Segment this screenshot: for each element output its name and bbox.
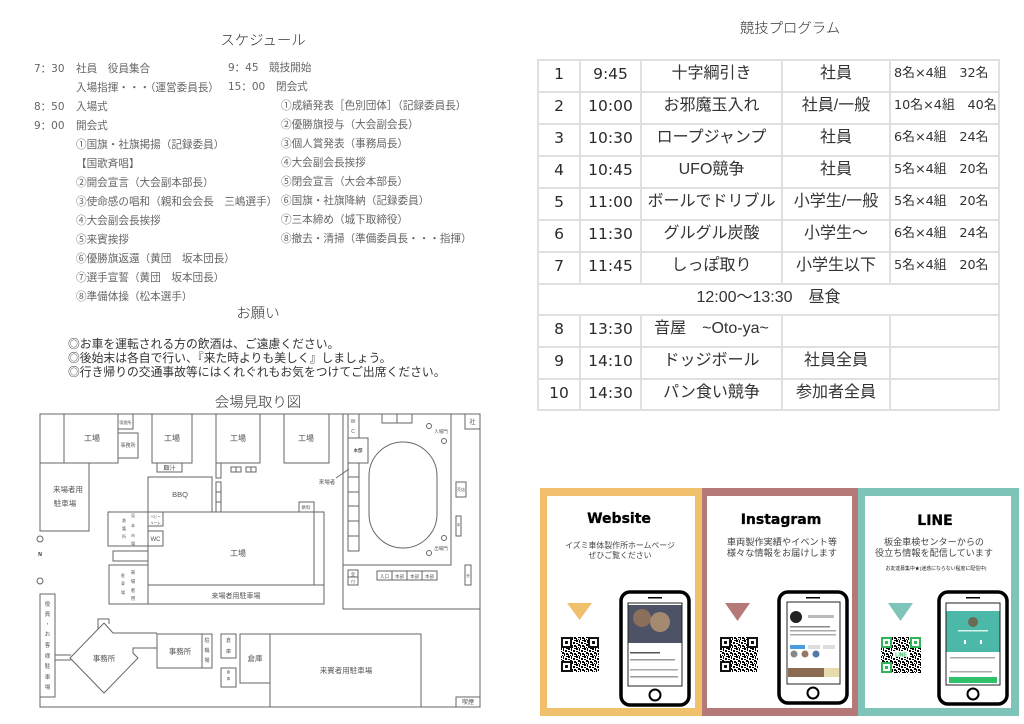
chart: venue floor plan: 見	[131, 512, 135, 518]
table: competition program: 小学生～	[804, 225, 868, 242]
qr code: line: LINE	[895, 652, 907, 658]
chart: venue floor plan: 輪	[204, 647, 210, 654]
chart: venue floor plan: 役	[45, 600, 51, 608]
panel: schedule right column: 9：45	[228, 62, 259, 74]
heading: venue map: 会場見取り図	[215, 395, 301, 411]
panel: schedule left column: 開会式	[76, 120, 108, 132]
table: competition program: 14:30	[588, 384, 633, 402]
panel: schedule left column: ⑤来賓挨拶	[76, 234, 129, 246]
chart: venue floor plan: 社	[469, 418, 476, 426]
table: competition program: パン食い競争	[663, 384, 760, 400]
chart: venue floor plan: W	[351, 419, 356, 425]
chart: venue floor plan: 救	[122, 517, 126, 523]
chart: venue floor plan: 売	[466, 573, 470, 578]
table: competition program: 5名×4組 20名	[894, 194, 988, 209]
table: competition program: 参加者全員	[796, 384, 876, 400]
card: website	[540, 488, 702, 716]
chart: venue floor plan: 本部	[410, 573, 419, 580]
title: competition program: 競技プログラム	[740, 21, 840, 37]
table: competition program: 社員/一般	[802, 97, 870, 114]
chart: venue floor plan: 駐	[204, 637, 210, 644]
chart: venue floor plan: N	[38, 552, 42, 558]
text block: requests: ◎後始末は各自で行い、『来た時よりも美しく』しましょう。	[68, 351, 391, 365]
table: competition program: 10名×4組 40名	[894, 98, 997, 113]
chart: venue floor plan: 来場者用駐車場	[212, 591, 260, 600]
card: line: LINE	[917, 513, 953, 529]
chart: venue floor plan: 場	[131, 540, 135, 546]
icon: phone website	[621, 592, 689, 705]
table: competition program: 9:45	[593, 65, 628, 83]
table: competition program: ドッジボール	[663, 352, 760, 369]
chart: venue floor plan: 者	[131, 588, 136, 594]
table: competition program: 14:10	[588, 352, 633, 370]
chart: venue floor plan: 駐車場	[54, 498, 77, 508]
table: competition program: しっぽ取り	[671, 257, 752, 274]
table: competition program: 5	[554, 193, 564, 211]
chart: venue floor plan: 客	[45, 641, 51, 649]
panel: schedule left column	[34, 62, 277, 303]
chart: venue floor plan: 工場	[164, 433, 180, 443]
chart: venue floor plan: 出場門	[434, 545, 448, 552]
text block: requests	[68, 337, 446, 379]
table: competition program: 十字綱引き	[671, 65, 752, 82]
table: competition program: 8名×4組 32名	[894, 66, 988, 81]
table: competition program: 11:30	[588, 225, 633, 243]
heading: requests: お願い	[236, 306, 280, 322]
table: competition program: 6名×4組 24名	[894, 130, 988, 145]
chart: venue floor plan: 場	[45, 683, 51, 691]
panel: schedule left column: 入場指揮・・・（運営委員長）	[76, 82, 219, 94]
chart: venue floor plan: 駐	[121, 572, 125, 578]
chart: venue floor plan	[36, 414, 480, 708]
chart: venue floor plan: 工場	[230, 433, 246, 443]
panel: schedule right column: ⑥国旗・社旗降納（記録委員）	[281, 195, 429, 207]
table: competition program: 3	[554, 129, 564, 147]
card: website: ぜひご覧ください	[588, 550, 652, 560]
table: competition program: 小学生以下	[796, 257, 876, 274]
table: competition program: 4	[554, 161, 564, 179]
table: competition program: 社員	[820, 65, 852, 82]
table: competition program: UFO競争	[679, 161, 744, 178]
chart: venue floor plan: 様	[45, 652, 51, 660]
qr code: line	[881, 637, 921, 673]
table: competition program	[537, 59, 1000, 411]
panel: schedule left column: 入場式	[76, 101, 108, 113]
chart: venue floor plan: ベビー	[150, 514, 161, 519]
panel: schedule left column: 8：50	[34, 101, 65, 113]
chart: venue floor plan: 倉庫	[248, 653, 263, 663]
chart: venue floor plan: 来場者	[319, 478, 336, 486]
chart: venue floor plan: 本部	[354, 447, 363, 454]
chart: venue floor plan: 事務所	[93, 653, 116, 663]
chart: venue floor plan: 本部	[425, 573, 434, 580]
chart: venue floor plan: 工場	[298, 433, 314, 443]
chart: venue floor plan: 事務所	[169, 646, 192, 656]
table: competition program: 10:00	[588, 97, 633, 115]
chart: venue floor plan: 車	[45, 673, 51, 681]
chart: venue floor plan: 倉	[226, 638, 231, 644]
panel: schedule right column: ②優勝旗授与（大会副会長）	[281, 119, 419, 131]
icon: phone line	[939, 592, 1007, 704]
table: competition program: 11:45	[588, 257, 633, 275]
chart: venue floor plan: 本	[457, 522, 461, 527]
table: competition program: 10:30	[588, 129, 633, 147]
table: competition program: 1	[554, 65, 564, 83]
table: competition program: 8	[554, 320, 564, 338]
panel: schedule right column: ⑧撤去・清掃（準備委員長・・・指揮）	[281, 233, 472, 245]
panel: schedule right column	[228, 62, 472, 245]
chart: venue floor plan: 受	[351, 571, 355, 577]
panel: schedule left column: 9：00	[34, 120, 65, 132]
chart: venue floor plan: 場	[121, 589, 125, 595]
chart: venue floor plan: 護	[122, 525, 126, 531]
card: line: 板金車検センターからの	[884, 536, 984, 547]
panel: schedule right column: ⑦三本締め（城下取締役）	[281, 214, 408, 226]
chart: venue floor plan: 車	[121, 580, 125, 586]
chart: venue floor plan: 来賓者用駐車場	[320, 665, 373, 675]
panel: schedule left column: 【国歌斉唱】	[76, 158, 140, 170]
panel: schedule right column: 競技開始	[269, 62, 311, 74]
icon: phone instagram	[779, 592, 847, 703]
panel: schedule right column: 閉会式	[276, 81, 308, 93]
table: competition program: 音屋 ~Oto-ya~	[654, 320, 769, 337]
panel: schedule right column: ③個人賞発表（事務局長）	[281, 138, 408, 150]
panel: schedule left column: 7：30	[34, 63, 65, 75]
panel: schedule left column: ①国旗・社旗掲揚（記録委員）	[76, 139, 224, 151]
table: competition program: 5名×4組 20名	[894, 258, 988, 273]
chart: venue floor plan: 駐	[45, 662, 51, 670]
panel: schedule left column: ②開会宣言（大会副本部長）	[76, 177, 214, 189]
table: competition program: グルグル炭酸	[663, 225, 760, 242]
chart: venue floor plan: 売店	[457, 486, 465, 492]
card: instagram: 車両製作実績やイベント等	[727, 536, 837, 547]
table: competition program: 社員全員	[804, 352, 868, 369]
card: website: Website	[587, 511, 651, 527]
table: competition program: 10	[549, 384, 569, 402]
card: instagram: Instagram	[741, 512, 821, 528]
qr code: website	[561, 637, 599, 672]
chart: venue floor plan: 場	[131, 578, 136, 585]
chart: venue floor plan: 来場者用	[53, 484, 83, 494]
table: competition program: 12:00～13:30 昼食	[696, 288, 841, 306]
chart: venue floor plan: 用	[131, 596, 135, 602]
table: competition program: 5名×4組 20名	[894, 162, 988, 177]
chart: venue floor plan: 工場	[230, 548, 246, 558]
table: competition program: 2	[554, 97, 564, 115]
chart: venue floor plan: お	[45, 631, 51, 638]
table: competition program: 13:30	[588, 320, 633, 338]
card: line	[858, 488, 1019, 716]
chart: venue floor plan: 顧汁	[163, 464, 176, 472]
panel: schedule right column: ①成績発表［色別団体］（記録委員長）	[281, 100, 466, 112]
chart: venue floor plan: 本部	[395, 573, 404, 580]
panel: schedule left column: ⑥優勝旗返還（黄団 坂本団長）	[76, 253, 235, 265]
table: competition program: 6	[554, 225, 564, 243]
chart: venue floor plan: 入場門	[434, 428, 448, 435]
chart: venue floor plan: 倉	[227, 669, 231, 674]
panel: schedule left column: ④大会副会長挨拶	[76, 215, 161, 227]
chart: venue floor plan: 事務所	[120, 442, 136, 449]
chart: venue floor plan: 工場	[84, 433, 100, 443]
panel: schedule right column: 15：00	[228, 81, 265, 93]
panel: schedule left column: ③使命感の唱和（親和会会長 三嶋選手）	[76, 196, 277, 208]
chart: venue floor plan: 来	[131, 570, 136, 576]
chart: venue floor plan: ・	[45, 622, 50, 628]
table: competition program: 10:45	[588, 161, 633, 179]
chart: venue floor plan: 喫煙所	[120, 419, 132, 425]
text block: requests: ◎お車を運転される方の飲酒は、ご遠慮ください。	[68, 337, 339, 351]
panel: schedule left column: 社員 役員集合	[76, 63, 150, 75]
table: competition program: ボールでドリブル	[647, 193, 776, 210]
chart: venue floor plan: 所	[122, 533, 126, 539]
table: competition program: 小学生/一般	[794, 193, 878, 210]
chart: venue floor plan: 員	[45, 611, 51, 618]
chart: venue floor plan: ルーム	[150, 520, 161, 525]
chart: venue floor plan: 市	[131, 532, 135, 538]
table: competition program: 社員	[820, 129, 852, 146]
table: competition program: 7	[554, 257, 564, 275]
table: competition program: お邪魔玉入れ	[663, 97, 760, 114]
qr code: instagram	[720, 637, 758, 672]
chart: venue floor plan: WC	[150, 537, 161, 543]
chart: venue floor plan: 場	[204, 657, 210, 664]
table: competition program: 11:00	[588, 193, 633, 211]
card: website: イズミ車体製作所ホームページ	[565, 540, 675, 550]
table: competition program: 6名×4組 24名	[894, 226, 988, 241]
chart: venue floor plan: 喫煙	[462, 698, 474, 706]
chart: venue floor plan: 飲料	[302, 504, 311, 511]
table: competition program: 社員	[820, 161, 852, 178]
card: instagram: 様々な情報をお届けします	[727, 547, 837, 558]
card: instagram	[702, 488, 858, 716]
chart: venue floor plan: 本	[131, 522, 135, 528]
chart: venue floor plan: 付	[351, 578, 355, 584]
chart: venue floor plan: C	[351, 429, 355, 435]
panel: schedule right column: ④大会副会長挨拶	[281, 157, 366, 169]
card: line: 役立ち情報を配信しています	[875, 547, 993, 558]
panel: schedule right column: ⑤閉会宣言（大会本部長）	[281, 176, 408, 188]
card: line: お友達募集中★(迷惑にならない程度に配信中)	[885, 565, 987, 572]
table: competition program: ロープジャンプ	[657, 129, 766, 146]
table: competition program: 9	[554, 352, 564, 370]
chart: venue floor plan: 入口	[380, 574, 389, 580]
panel: schedule left column: ⑧準備体操（松本選手）	[76, 291, 193, 303]
chart: venue floor plan: 庫	[227, 676, 231, 681]
chart: venue floor plan: BBQ	[172, 490, 188, 499]
title: schedule: スケジュール	[220, 33, 306, 49]
chart: venue floor plan: 庫	[226, 648, 231, 655]
text block: requests: ◎行き帰りの交通事故等にはくれぐれもお気をつけてご出席ください。	[68, 365, 446, 379]
panel: schedule left column: ⑦選手宣誓（黄団 坂本団長）	[76, 272, 224, 284]
